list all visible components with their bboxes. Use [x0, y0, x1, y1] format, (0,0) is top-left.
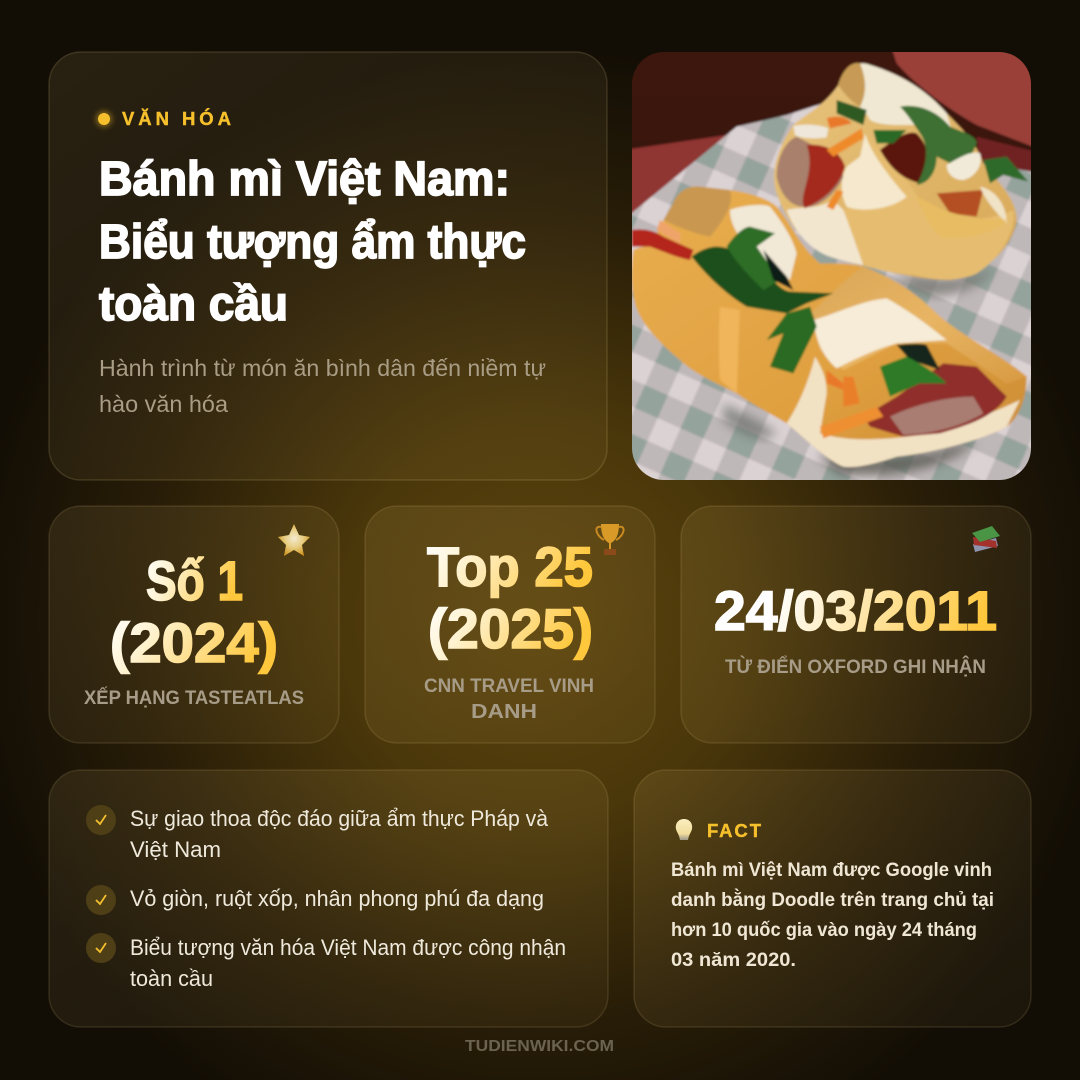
stat label — [424, 676, 594, 723]
tag: văn hóa: VĂN HÓA — [122, 108, 231, 129]
stat label: CNN TRAVEL VINH — [424, 676, 594, 697]
heading: toàn cầu — [99, 278, 288, 331]
subtitle — [99, 355, 546, 417]
item 2: Vỏ giòn, ruột xốp, nhân phong phú đa dạng — [130, 886, 544, 911]
panel: fact — [634, 770, 1031, 1027]
stat value — [427, 535, 593, 660]
stat label: TỪ ĐIỂN OXFORD GHI NHẬN — [725, 656, 986, 678]
panel: stat top 25 — [365, 506, 655, 743]
heading — [99, 153, 526, 331]
fact text — [671, 860, 994, 971]
icon: books — [972, 526, 1000, 552]
stat value: (2024) — [110, 611, 278, 674]
panel: title — [49, 52, 607, 480]
item 1: Sự giao thoa độc đáo giữa ẩm thực Pháp và — [130, 806, 549, 831]
subtitle: hào văn hóa — [99, 391, 228, 417]
stat label: DANH — [471, 700, 537, 723]
stat value — [110, 549, 278, 674]
panel: checklist — [49, 770, 608, 1027]
stat value: 24/03/2011 — [714, 579, 997, 642]
footer watermark: TUDIENWIKI.COM — [465, 1038, 614, 1055]
stat value: (2025) — [428, 597, 593, 660]
panel: stat oxford — [681, 506, 1031, 743]
item 3: Biểu tượng văn hóa Việt Nam được công nhận — [130, 935, 566, 960]
stat label: XẾP HẠNG TASTEATLAS — [84, 687, 304, 709]
photo: banh mi — [623, 43, 1042, 492]
icon: light bulb — [676, 819, 692, 840]
item 1 — [86, 805, 549, 862]
fact text: danh bằng Doodle trên trang chủ tại — [671, 889, 994, 911]
subtitle: Hành trình từ món ăn bình dân đến niềm tự — [99, 355, 546, 381]
heading: Bánh mì Việt Nam: — [99, 153, 510, 206]
heading: Biểu tượng ẩm thực — [99, 216, 526, 269]
stat value: Top 25 — [427, 535, 593, 598]
icon: star — [278, 524, 310, 556]
item 3 — [86, 933, 566, 991]
item 1: Việt Nam — [130, 837, 221, 862]
item 3: toàn cầu — [130, 966, 213, 991]
fact text: 03 năm 2020. — [671, 950, 796, 971]
fact label: FACT — [707, 820, 762, 841]
panel: stat số 1 — [49, 506, 339, 743]
icon: trophy — [596, 524, 624, 555]
stat value: Số 1 — [146, 549, 243, 612]
fact text: Bánh mì Việt Nam được Google vinh — [671, 860, 992, 881]
fact text: hơn 10 quốc gia vào ngày 24 tháng — [671, 920, 977, 941]
